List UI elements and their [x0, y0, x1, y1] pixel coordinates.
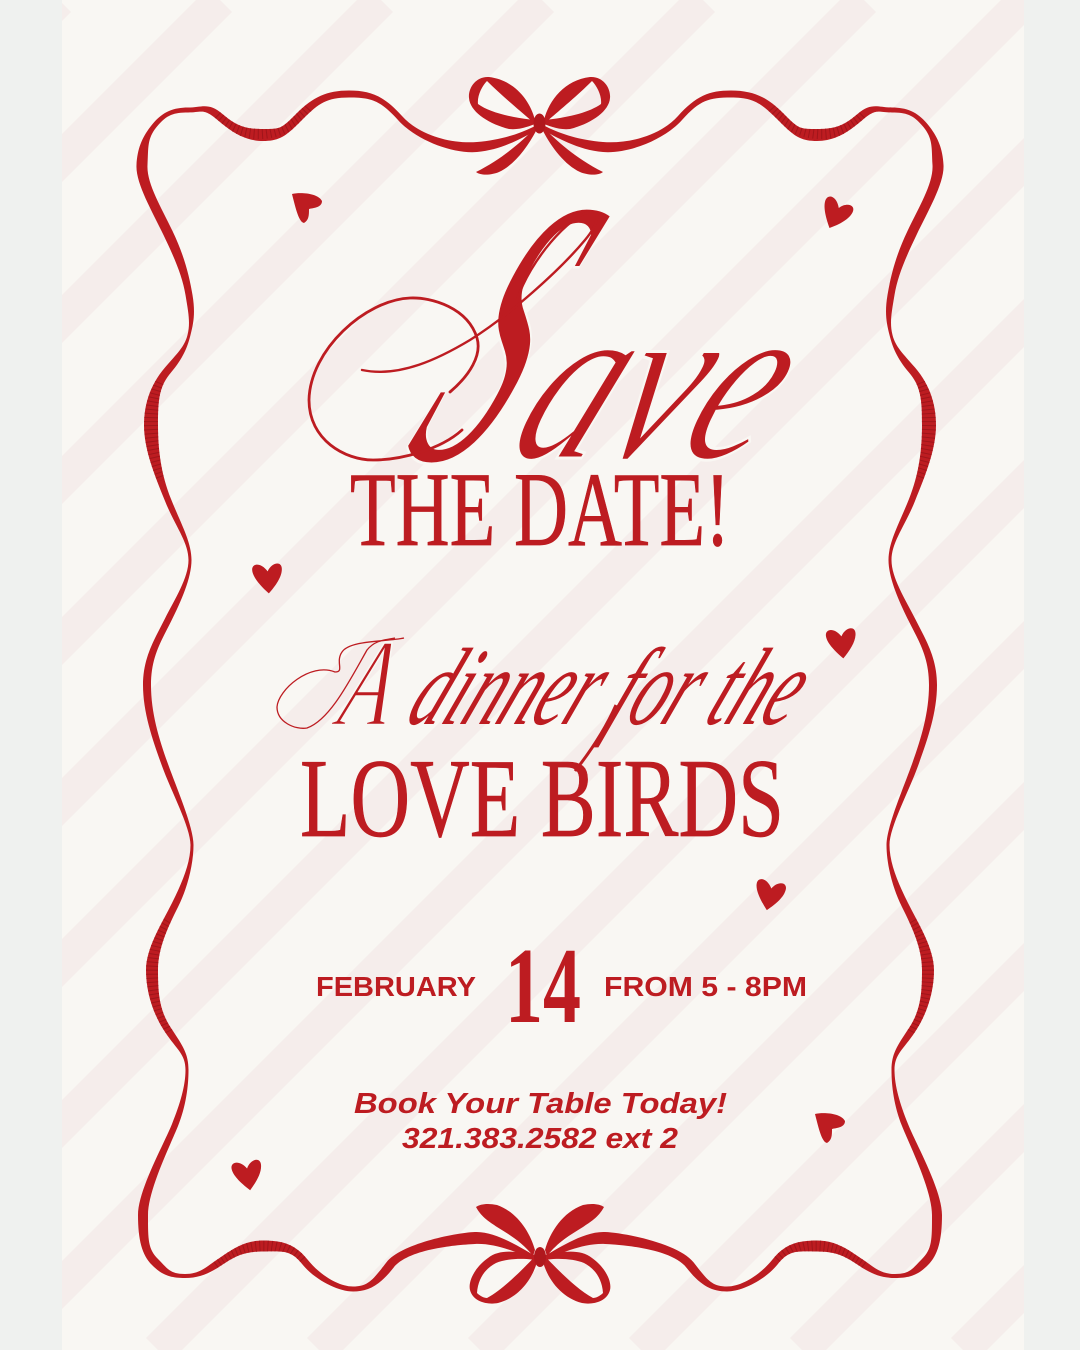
- heading: The Date: THE DATE!: [350, 451, 730, 568]
- icon: heart middle right: [825, 628, 858, 660]
- icon: top bow: [469, 77, 610, 175]
- ribbon: right half: [541, 90, 944, 1292]
- booking call to action: [354, 1088, 727, 1155]
- number: 14: 14: [505, 927, 581, 1046]
- ribbon frame: [136, 90, 944, 1292]
- icon: heart top left: [292, 193, 322, 223]
- subheading: A dinner for the: [277, 615, 832, 771]
- heading: Love Birds: LOVE BIRDS: [300, 737, 784, 861]
- icon: heart lower right: [752, 878, 787, 913]
- icon: heart bottom left: [231, 1159, 264, 1192]
- title: Save: ave: [480, 251, 849, 508]
- text: February: FEBRUARY: [316, 971, 476, 1002]
- text: phone number: 321.383.2582 ext 2: [402, 1123, 678, 1155]
- title: Save: S: [354, 121, 664, 542]
- title flourish: swash strokes: [309, 212, 597, 460]
- text: book your table: Book Your Table Today!: [354, 1088, 727, 1120]
- title: Save: [309, 121, 849, 542]
- icon: bottom bow: [470, 1204, 610, 1304]
- subheading: A dinner for the: dinner for the: [392, 627, 832, 748]
- date line: [316, 927, 807, 1046]
- flourish: A swash: [277, 638, 404, 728]
- icon: heart middle left: [252, 563, 283, 594]
- flourish: f descender: [575, 705, 616, 771]
- text: time: FROM 5 - 8PM: [604, 971, 807, 1002]
- ribbon: left half: [136, 90, 539, 1292]
- icon: heart top right: [816, 195, 855, 234]
- icon: heart bottom right: [815, 1113, 845, 1143]
- subheading: A dinner for the: A: [323, 615, 415, 753]
